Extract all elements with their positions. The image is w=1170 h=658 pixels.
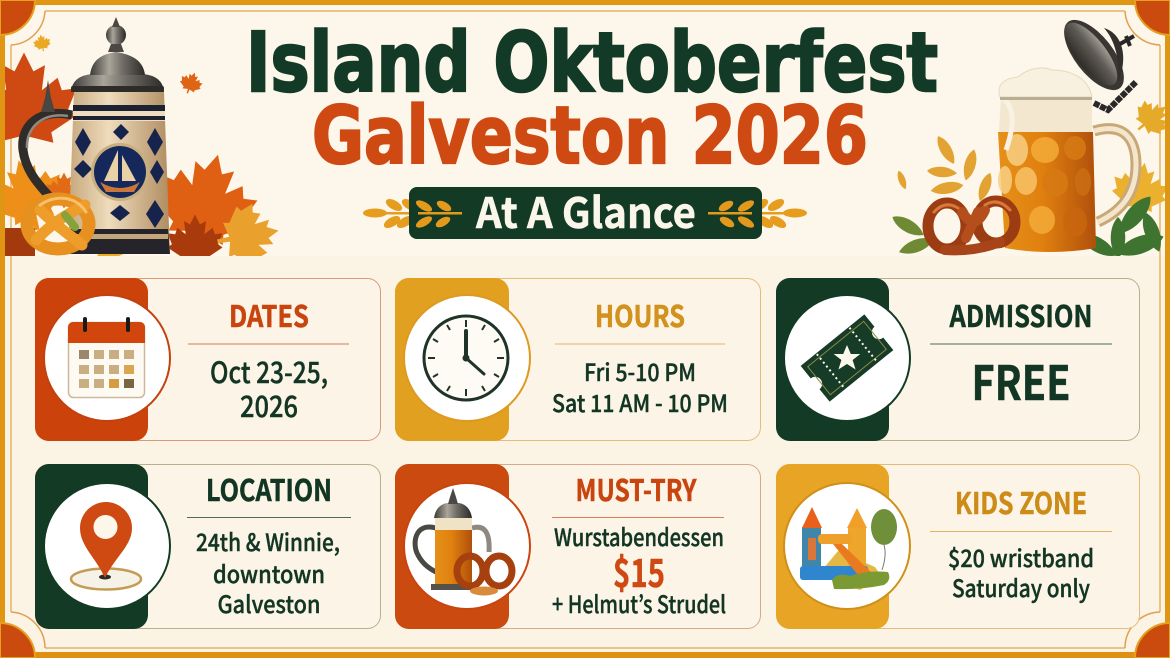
text: location: 24th & Winnie,	[196, 523, 340, 558]
banner: At A Glance	[363, 180, 807, 241]
title	[246, 16, 938, 182]
title line 1: Island Oktoberfest	[246, 16, 938, 111]
illustration: brown pretzel right	[928, 201, 1015, 250]
heading: dates: DATES	[229, 292, 309, 336]
text: must-try: $15	[613, 543, 665, 599]
heading: location: LOCATION	[206, 466, 332, 510]
text: must-try	[552, 518, 726, 620]
icon: stein and pretzel	[415, 488, 512, 596]
text: hours: Fri 5-10 PM	[584, 353, 696, 388]
heading: admission: ADMISSION	[949, 292, 1092, 336]
icon: calendar	[68, 317, 145, 398]
text: must-try: + Helmut’s Strudel	[552, 585, 726, 620]
illustration: autumn leaves left	[5, 34, 278, 256]
text: dates	[210, 350, 328, 426]
illustration: right side leaves	[892, 100, 1165, 256]
icon: bounce house and balloon	[800, 507, 897, 590]
panel: admission	[776, 278, 1140, 441]
heading: kids zone: KIDS ZONE	[955, 479, 1087, 523]
text: must-try: Wurstabendessen	[554, 518, 724, 553]
text: hours	[552, 353, 728, 419]
icon: ticket	[801, 314, 893, 402]
text: kids zone: $20 wristband	[948, 539, 1094, 574]
panel: location	[35, 464, 380, 629]
text: location: Galveston	[218, 585, 320, 620]
heading: must-try: MUST-TRY	[576, 466, 697, 510]
text: dates: Oct 23-25,	[210, 350, 328, 392]
banner text: At A Glance	[475, 180, 696, 241]
text: hours: Sat 11 AM - 10 PM	[552, 384, 728, 419]
icon: map pin	[71, 502, 141, 590]
wheat ornament right	[708, 197, 807, 230]
header background	[5, 5, 1165, 256]
title line 2: Galveston 2026	[312, 90, 868, 182]
text: kids zone: Saturday only	[952, 569, 1090, 604]
text: dates: 2026	[240, 384, 298, 426]
text: location: downtown	[213, 555, 325, 590]
illustration: ceramic beer stein	[23, 17, 170, 254]
panel: dates	[35, 278, 380, 441]
panel: kids zone	[776, 464, 1140, 629]
text: free: FREE	[972, 345, 1070, 414]
illustration: golden pretzel left	[27, 198, 89, 249]
text: kids zone	[948, 539, 1094, 604]
heading: hours: HOURS	[595, 292, 685, 336]
wheat ornament left	[363, 197, 461, 230]
panel: must-try	[395, 464, 760, 629]
icon: clock	[424, 316, 508, 400]
panel: hours	[395, 278, 760, 441]
illustration: glass beer mug	[998, 10, 1136, 252]
text: location	[196, 523, 340, 620]
